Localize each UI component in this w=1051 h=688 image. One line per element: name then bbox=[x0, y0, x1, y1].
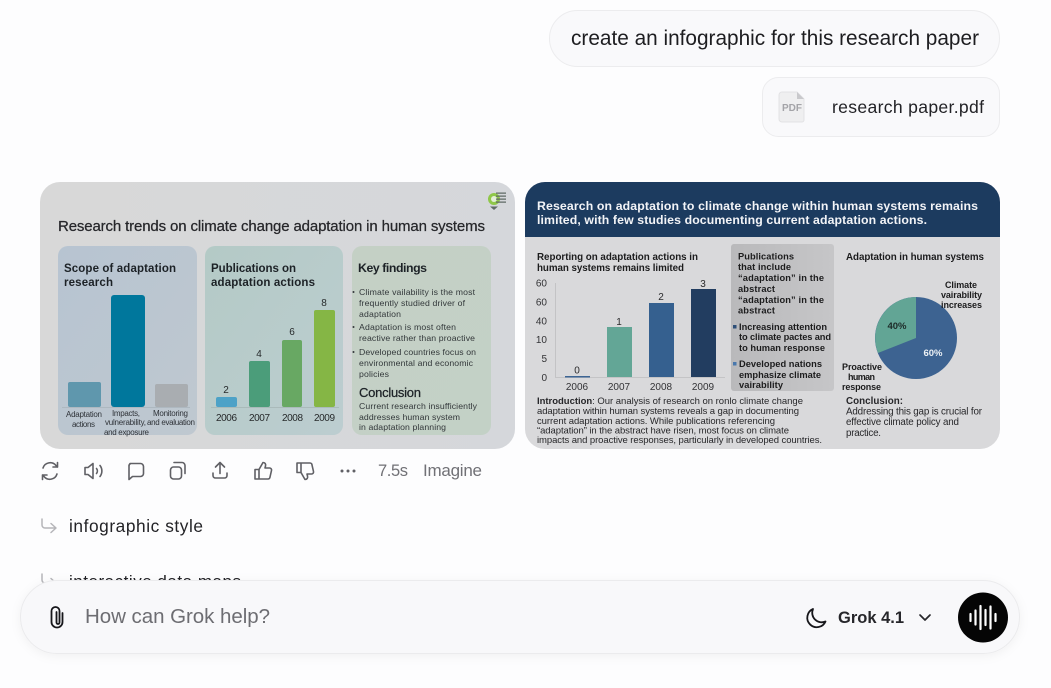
suggestion: infographic style: infographic style bbox=[69, 516, 203, 536]
bar chart: scope bbox=[62, 295, 190, 408]
suggestion: interactive data maps: interactive data maps bbox=[69, 572, 241, 591]
bar labels: scope: and exposure bbox=[104, 428, 150, 437]
header banner: limited, with few studies documenting current adaptation actions. bbox=[537, 213, 927, 227]
bar labels: scope bbox=[66, 409, 195, 437]
bullet list: reactive rather than proactive bbox=[359, 333, 475, 343]
introduction text bbox=[537, 396, 822, 446]
callout bullets: to human response bbox=[739, 343, 825, 353]
pie value labels: 60% bbox=[923, 348, 943, 359]
callout bullets: vairability bbox=[739, 380, 784, 390]
callout text: “adaptation” in the bbox=[738, 295, 824, 305]
conclusion: effective climate policy and bbox=[846, 417, 959, 428]
year labels: 2006 bbox=[566, 382, 589, 393]
conclusion bbox=[846, 396, 983, 439]
panel: publications callout bbox=[731, 244, 834, 391]
panel heading bbox=[211, 263, 315, 289]
icon: speaker bbox=[85, 464, 102, 478]
y axis labels bbox=[536, 278, 547, 384]
bar values: 0 bbox=[574, 366, 580, 376]
response time: 7.5s bbox=[378, 462, 408, 480]
conclusion text: Current research insufficiently bbox=[359, 401, 478, 411]
callout text: that include bbox=[738, 262, 791, 272]
conclusion text: addresses human system bbox=[359, 412, 460, 422]
icon: thumbs down bbox=[297, 463, 314, 480]
icon: regenerate bbox=[42, 462, 58, 480]
conclusion: practice. bbox=[846, 428, 881, 439]
y axis labels: 10 bbox=[536, 335, 547, 346]
bar labels: scope: actions bbox=[72, 420, 95, 429]
input bar bbox=[20, 580, 1020, 654]
icon: pdf file: PDF bbox=[782, 102, 803, 114]
callout text: “adaptation” in the bbox=[738, 273, 824, 283]
attachment chip bbox=[762, 78, 1000, 136]
action toolbar bbox=[42, 462, 356, 480]
introduction text: adaptation within human systems reveals a gap in documenting bbox=[537, 406, 799, 417]
bar chart: reporting by year bbox=[536, 278, 725, 393]
input placeholder: How can Grok help? bbox=[85, 605, 270, 628]
icon: copy bbox=[170, 462, 185, 479]
generated image: adaptation research infographic bbox=[525, 182, 1000, 449]
icon: chevron bbox=[920, 615, 930, 620]
pie chart: adaptation in human systems bbox=[875, 297, 957, 379]
callout bullets: to climate pactes and bbox=[739, 332, 831, 342]
year labels: 2009 bbox=[692, 382, 715, 393]
bar labels: scope: Monitoring bbox=[153, 409, 188, 418]
year labels: 2006 bbox=[216, 413, 237, 424]
conclusion: Addressing this gap is crucial for bbox=[846, 406, 983, 418]
conclusion heading: Conclusion bbox=[359, 385, 421, 400]
bar labels: scope: Impacts, bbox=[112, 409, 140, 418]
bullet list: Developed countries focus on bbox=[359, 347, 476, 357]
y axis labels: 60 bbox=[536, 278, 547, 290]
bar values: 6 bbox=[289, 327, 295, 338]
pie value labels: 40% bbox=[887, 321, 907, 332]
generated image: research trends infographic bbox=[40, 182, 515, 449]
bar values: 2 bbox=[223, 385, 229, 396]
year labels: 2008 bbox=[650, 382, 673, 393]
icon: comment bbox=[129, 464, 144, 480]
callout bullets: Developed nations bbox=[739, 359, 822, 369]
bullet list: Adaptation is most often bbox=[359, 322, 456, 332]
key findings heading: Key findings bbox=[358, 261, 427, 275]
bullet list: policies bbox=[359, 369, 390, 379]
y axis labels: 40 bbox=[536, 316, 547, 328]
bullet list: frequently studied driver of bbox=[359, 298, 466, 308]
bullet list: Climate vailability is the most bbox=[359, 287, 476, 297]
bar values: 3 bbox=[700, 279, 706, 290]
user prompt bubble: create an infographic for this research paper bbox=[571, 27, 979, 50]
icon: more bbox=[340, 470, 356, 472]
panel heading: adaptation actions bbox=[211, 277, 315, 289]
y axis labels: 0 bbox=[541, 373, 547, 384]
y axis labels: 60 bbox=[536, 298, 547, 308]
y axis labels: 5 bbox=[541, 354, 547, 365]
bar labels: scope: and evaluation bbox=[147, 418, 195, 427]
conclusion: Conclusion: bbox=[846, 396, 903, 407]
pie label: proactive response bbox=[842, 362, 882, 392]
panel: key findings bbox=[352, 246, 491, 435]
pie label: climate variability: increases bbox=[941, 300, 982, 310]
infographic title: Research trends on climate change adaptation in human systems bbox=[58, 218, 485, 235]
callout bullets bbox=[733, 322, 831, 390]
callout bullets: Increasing attention bbox=[739, 322, 827, 332]
pie chart heading: Adaptation in human systems bbox=[846, 252, 985, 263]
year labels bbox=[566, 382, 715, 393]
bullet list: adaptation bbox=[359, 309, 401, 319]
attachment chip: research paper.pdf bbox=[832, 97, 984, 117]
pie label: climate variability bbox=[941, 280, 982, 310]
bullet list bbox=[352, 287, 476, 379]
introduction text: impacts and proactive responses, particularly in developed countries. bbox=[537, 435, 822, 446]
panel heading bbox=[64, 263, 176, 289]
bar values: 1 bbox=[616, 317, 622, 328]
bar values bbox=[223, 298, 327, 396]
bar values bbox=[574, 279, 706, 376]
pie label: climate variability: Climate bbox=[945, 280, 977, 290]
model selector: Grok 4.1 bbox=[838, 609, 904, 627]
panel heading: Publications on bbox=[211, 263, 296, 275]
callout text: Publications bbox=[738, 252, 794, 262]
callout bullets: emphasize climate bbox=[739, 370, 821, 380]
icon: pdf file bbox=[779, 92, 804, 122]
conclusion text bbox=[359, 401, 478, 432]
bar labels: scope: Adaptation bbox=[66, 410, 102, 419]
pie label: climate variability: vairability bbox=[941, 290, 982, 300]
year labels bbox=[216, 413, 335, 424]
year labels: 2009 bbox=[314, 413, 335, 424]
year labels: 2007 bbox=[249, 413, 270, 424]
year labels: 2007 bbox=[608, 382, 631, 393]
icon: moon bbox=[807, 609, 826, 627]
pie label: proactive response: response bbox=[842, 382, 881, 392]
user prompt bubble bbox=[550, 10, 1000, 66]
bullet list: environmental and economic bbox=[359, 358, 474, 368]
chart heading: Reporting on adaptation actions in bbox=[537, 252, 698, 263]
panel: publications on adaptation actions bbox=[205, 246, 343, 435]
voice button bbox=[958, 592, 1008, 642]
model tag: Imagine bbox=[423, 461, 482, 480]
callout text: abstract bbox=[738, 284, 775, 294]
panel: scope of adaptation research bbox=[58, 246, 197, 437]
conclusion text: in adaptation planning bbox=[359, 422, 446, 432]
bar values: 4 bbox=[256, 349, 262, 360]
header banner bbox=[525, 182, 1000, 237]
bar values: 8 bbox=[321, 298, 327, 309]
bar labels: scope: vulnerability, bbox=[105, 418, 146, 427]
icon: share bbox=[213, 462, 227, 478]
callout text bbox=[738, 252, 824, 316]
panel heading: research bbox=[64, 277, 113, 289]
bar chart: publications bbox=[211, 310, 339, 408]
introduction text: “adaptation” in the abstract have risen, most focus on climate bbox=[537, 426, 789, 436]
introduction text: Introduction: Our analysis of research on ronlo climate change bbox=[537, 396, 803, 407]
icon: paperclip bbox=[52, 607, 62, 628]
introduction text: current adaptation actions. While publications referencing bbox=[537, 416, 775, 427]
pie label: proactive response: Proactive bbox=[842, 362, 882, 372]
bar values: 2 bbox=[658, 292, 664, 303]
icon: thumbs up bbox=[255, 462, 272, 479]
icon: logo bbox=[488, 192, 506, 210]
year labels: 2008 bbox=[282, 413, 303, 424]
header banner: Research on adaptation to climate change within human systems remains bbox=[537, 199, 978, 213]
pie value labels bbox=[887, 321, 943, 359]
panel heading: Scope of adaptation bbox=[64, 263, 176, 275]
pie label: proactive response: human bbox=[848, 372, 875, 382]
callout text: abstract bbox=[738, 306, 775, 316]
chart heading bbox=[537, 252, 698, 274]
chart heading: human systems remains limited bbox=[537, 263, 684, 274]
